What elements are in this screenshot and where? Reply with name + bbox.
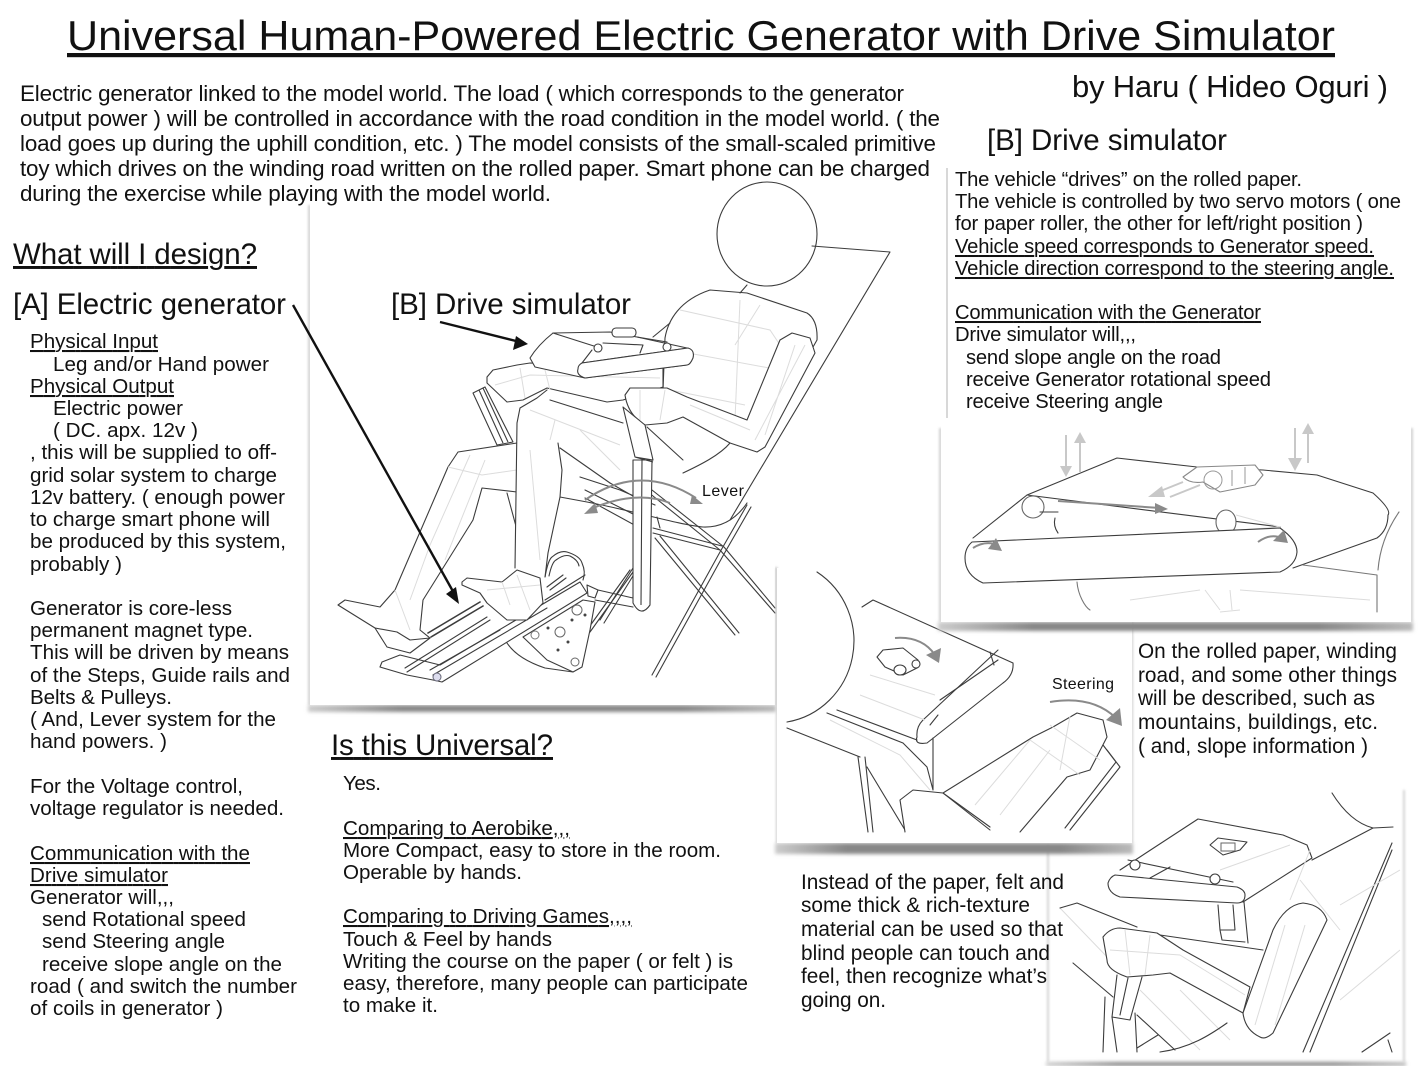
arrow to drive simulator — [440, 322, 528, 350]
text block: electric generator details: hand powers. ) — [30, 730, 167, 753]
label: Lever: Lever — [702, 483, 745, 500]
panel: model close-up with hand on steering — [775, 568, 1133, 854]
arrows: up and down motion — [1060, 423, 1314, 477]
icon: model vehicle — [877, 648, 920, 675]
far leg and foot — [338, 443, 517, 653]
text block: electric generator details: send Steering angle — [42, 930, 225, 953]
text block: universal comparison: More Compact, easy to store in the room. — [343, 839, 721, 862]
torso — [653, 285, 817, 440]
text block: electric generator details: Physical Output — [30, 375, 174, 398]
text block: rolled paper note — [1137, 640, 1397, 758]
text block: introduction: Electric generator linked to the model world. The load ( which corresponds to the generator — [20, 81, 905, 106]
text block: electric generator details: ( And, Lever system for the — [30, 708, 276, 731]
far arm — [487, 363, 663, 402]
text block: electric generator details: Leg and/or Hand power — [53, 353, 269, 376]
text block: electric generator details: voltage regulator is needed. — [30, 797, 284, 820]
chair frame and legs — [560, 246, 890, 677]
text block: electric generator details: of the Steps, Guide rails and — [30, 664, 290, 687]
text block: introduction: toy which drives on the winding road written on the rolled paper. Smart phone can be charged — [20, 156, 930, 181]
text block: electric generator details: Generator is core-less — [30, 597, 232, 620]
text block: drive simulator details: send slope angle on the road — [966, 347, 1221, 369]
arrow: model turning — [895, 638, 941, 663]
text block: electric generator details: road ( and switch the number — [30, 975, 297, 998]
heading: is this universal: Is this Universal? — [331, 729, 553, 762]
text block: drive simulator details: The vehicle “drives” on the rolled paper. — [955, 169, 1302, 191]
text block: drive simulator details: for paper roller, the other for left/right position ) — [955, 213, 1363, 235]
text block: felt for blind people note: some thick & rich-texture — [801, 894, 1030, 917]
text block: introduction: load goes up during the uphill condition, etc. ) The model consists of the small-scaled primitive — [20, 131, 936, 156]
text block: electric generator details: receive slope angle on the — [42, 953, 282, 976]
text block: universal comparison: Touch & Feel by hands — [343, 928, 552, 951]
text block: felt for blind people note: blind people can touch and — [801, 942, 1050, 965]
text block: rolled paper note: mountains, buildings, etc. — [1138, 711, 1378, 734]
icon: rider head — [717, 182, 817, 286]
text block: felt for blind people note: going on. — [801, 989, 886, 1012]
text block: electric generator details: Physical Input — [30, 330, 158, 353]
text block: felt for blind people note — [801, 871, 1064, 1012]
text block: rolled paper note: will be described, such as — [1137, 687, 1375, 710]
text block: electric generator details: For the Voltage control, — [30, 775, 243, 798]
icon: vehicle on felt — [1210, 838, 1247, 855]
near thigh and leg — [515, 390, 623, 577]
near foot on step — [462, 570, 543, 620]
text block: electric generator details: , this will be supplied to off- — [30, 441, 277, 464]
text block: universal comparison: to make it. — [343, 994, 438, 1017]
text block: introduction — [20, 81, 940, 206]
text block: universal comparison: Yes. — [343, 772, 381, 795]
text block: drive simulator details — [946, 168, 1401, 418]
text block: felt for blind people note: feel, then recognize what’s — [801, 965, 1047, 988]
text block: drive simulator details: Drive simulator will,,, — [955, 324, 1136, 346]
near armrest post — [623, 407, 653, 611]
text block: felt for blind people note: material can be used so that — [801, 918, 1063, 941]
heading: what will I design: What will I design? — [13, 238, 257, 271]
arrows: roller rotation — [973, 530, 1288, 551]
text block: rolled paper note: On the rolled paper, winding — [1138, 640, 1397, 663]
text block: electric generator details: of coils in generator ) — [30, 997, 223, 1020]
arrow: steering — [1050, 700, 1122, 726]
text block: rolled paper note: ( and, slope information ) — [1138, 735, 1368, 758]
heading: drive simulator label: [B] Drive simulator — [391, 288, 631, 321]
text block: introduction: output power ) will be controlled in accordance with the road condition in the model world. ( the — [20, 106, 940, 131]
panel: blind-accessible felt version illustration — [1046, 790, 1406, 1066]
text block: felt for blind people note: Instead of the paper, felt and — [801, 871, 1064, 894]
text block: electric generator details: Communication with the — [30, 842, 250, 865]
author: by Haru ( Hideo Oguri ) — [1072, 69, 1388, 104]
label: Steering: Steering — [1052, 676, 1114, 693]
far armrest post — [473, 387, 513, 445]
text block: universal comparison: Comparing to Aerobike,,, — [343, 817, 570, 840]
text block: electric generator details: Belts & Pulleys. — [30, 686, 172, 709]
text block: universal comparison: Comparing to Driving Games,,,, — [343, 905, 632, 928]
text block: universal comparison: Operable by hands. — [343, 861, 522, 884]
heading: drive simulator section: [B] Drive simulator — [987, 124, 1227, 157]
heading: electric generator: [A] Electric generator — [13, 288, 286, 321]
text block: drive simulator details: Vehicle speed corresponds to Generator speed. — [955, 236, 1374, 258]
text block: electric generator details — [30, 330, 297, 1020]
text block: electric generator details: This will be driven by means — [30, 641, 289, 664]
text block: universal comparison: Writing the course on the paper ( or felt ) is — [343, 950, 733, 973]
text block: electric generator details: send Rotational speed — [42, 908, 246, 931]
lever arrows — [584, 480, 703, 514]
text block: electric generator details: Electric power — [53, 397, 183, 420]
arrows: vehicle movement — [1058, 482, 1200, 514]
text block: universal comparison — [343, 772, 748, 1017]
text block: universal comparison: easy, therefore, many people can participate — [343, 972, 748, 995]
text block: electric generator details: permanent magnet type. — [30, 619, 253, 642]
panel: roller mechanism close-up — [938, 420, 1413, 631]
text block: drive simulator details: Vehicle direction correspond to the steering angle. — [955, 258, 1394, 280]
text block: electric generator details: be produced by this system, — [30, 530, 286, 553]
arrow to generator — [293, 305, 459, 604]
text block: electric generator details: 12v battery. ( enough power — [30, 486, 285, 509]
text block: electric generator details: to charge smart phone will — [30, 508, 270, 531]
text block: electric generator details: Drive simulator — [30, 864, 168, 887]
seat edge under arm — [647, 427, 730, 473]
text block: electric generator details: probably ) — [30, 553, 122, 576]
text block: drive simulator details: receive Steering angle — [966, 391, 1163, 413]
title: Universal Human-Powered Electric Generator with Drive Simulator — [67, 12, 1335, 59]
drive simulator on lap — [530, 328, 693, 378]
text block: electric generator details: ( DC. apx. 12v ) — [53, 419, 198, 442]
text block: rolled paper note: road, and some other things — [1138, 664, 1397, 687]
icon: vehicle on belt — [1183, 465, 1263, 492]
text block: introduction: during the exercise while playing with the model world. — [20, 181, 551, 206]
near arm — [625, 333, 815, 452]
text block: drive simulator details: receive Generator rotational speed — [966, 369, 1271, 391]
panel: main illustration of seated rider on generator — [293, 182, 890, 712]
generator rails, wheel and plate — [380, 552, 633, 682]
text block: drive simulator details: The vehicle is controlled by two servo motors ( one — [955, 191, 1401, 213]
text block: electric generator details: Generator will,,, — [30, 886, 174, 909]
text block: drive simulator details: Communication with the Generator — [955, 302, 1261, 324]
text block: electric generator details: grid solar system to charge — [30, 464, 277, 487]
